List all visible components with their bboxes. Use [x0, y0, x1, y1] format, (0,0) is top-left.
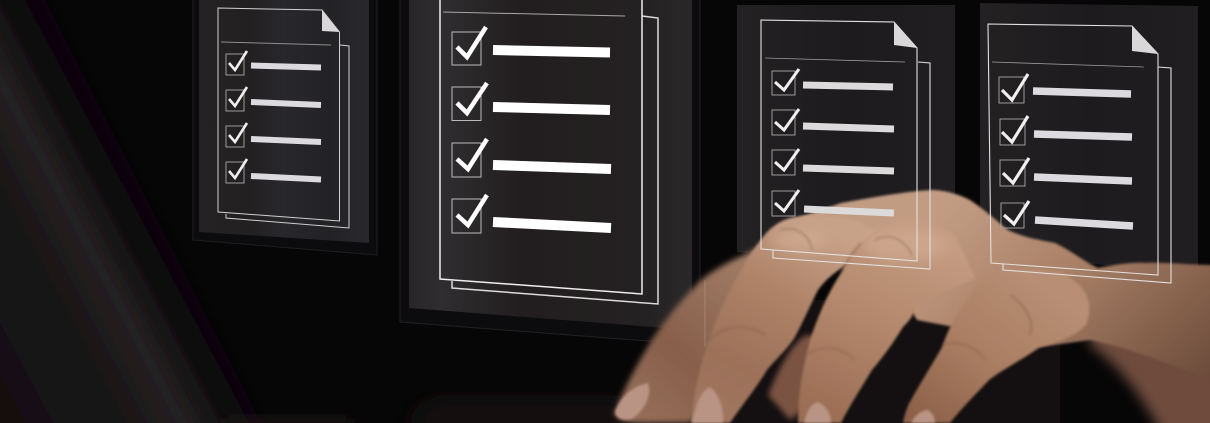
fingernails	[615, 383, 935, 423]
panel 4	[980, 3, 1198, 275]
panel 2	[400, 0, 700, 345]
back of hand	[800, 190, 1210, 380]
finger: far left	[615, 245, 775, 423]
hand	[615, 190, 1210, 423]
document 1	[218, 8, 349, 228]
document 2	[440, 0, 658, 304]
finger: middle	[798, 214, 975, 423]
lower wrist	[1090, 330, 1210, 423]
panel 3	[737, 5, 955, 272]
document 4	[988, 24, 1171, 283]
finger: index	[691, 216, 880, 423]
document 3	[761, 20, 930, 269]
panel 1	[193, 0, 377, 255]
finger: ring	[903, 269, 1089, 423]
knuckle highlights	[772, 228, 947, 261]
panel edge over hand	[704, 280, 706, 347]
crease shadows	[709, 229, 1031, 360]
finger: tucked behind	[768, 335, 840, 420]
